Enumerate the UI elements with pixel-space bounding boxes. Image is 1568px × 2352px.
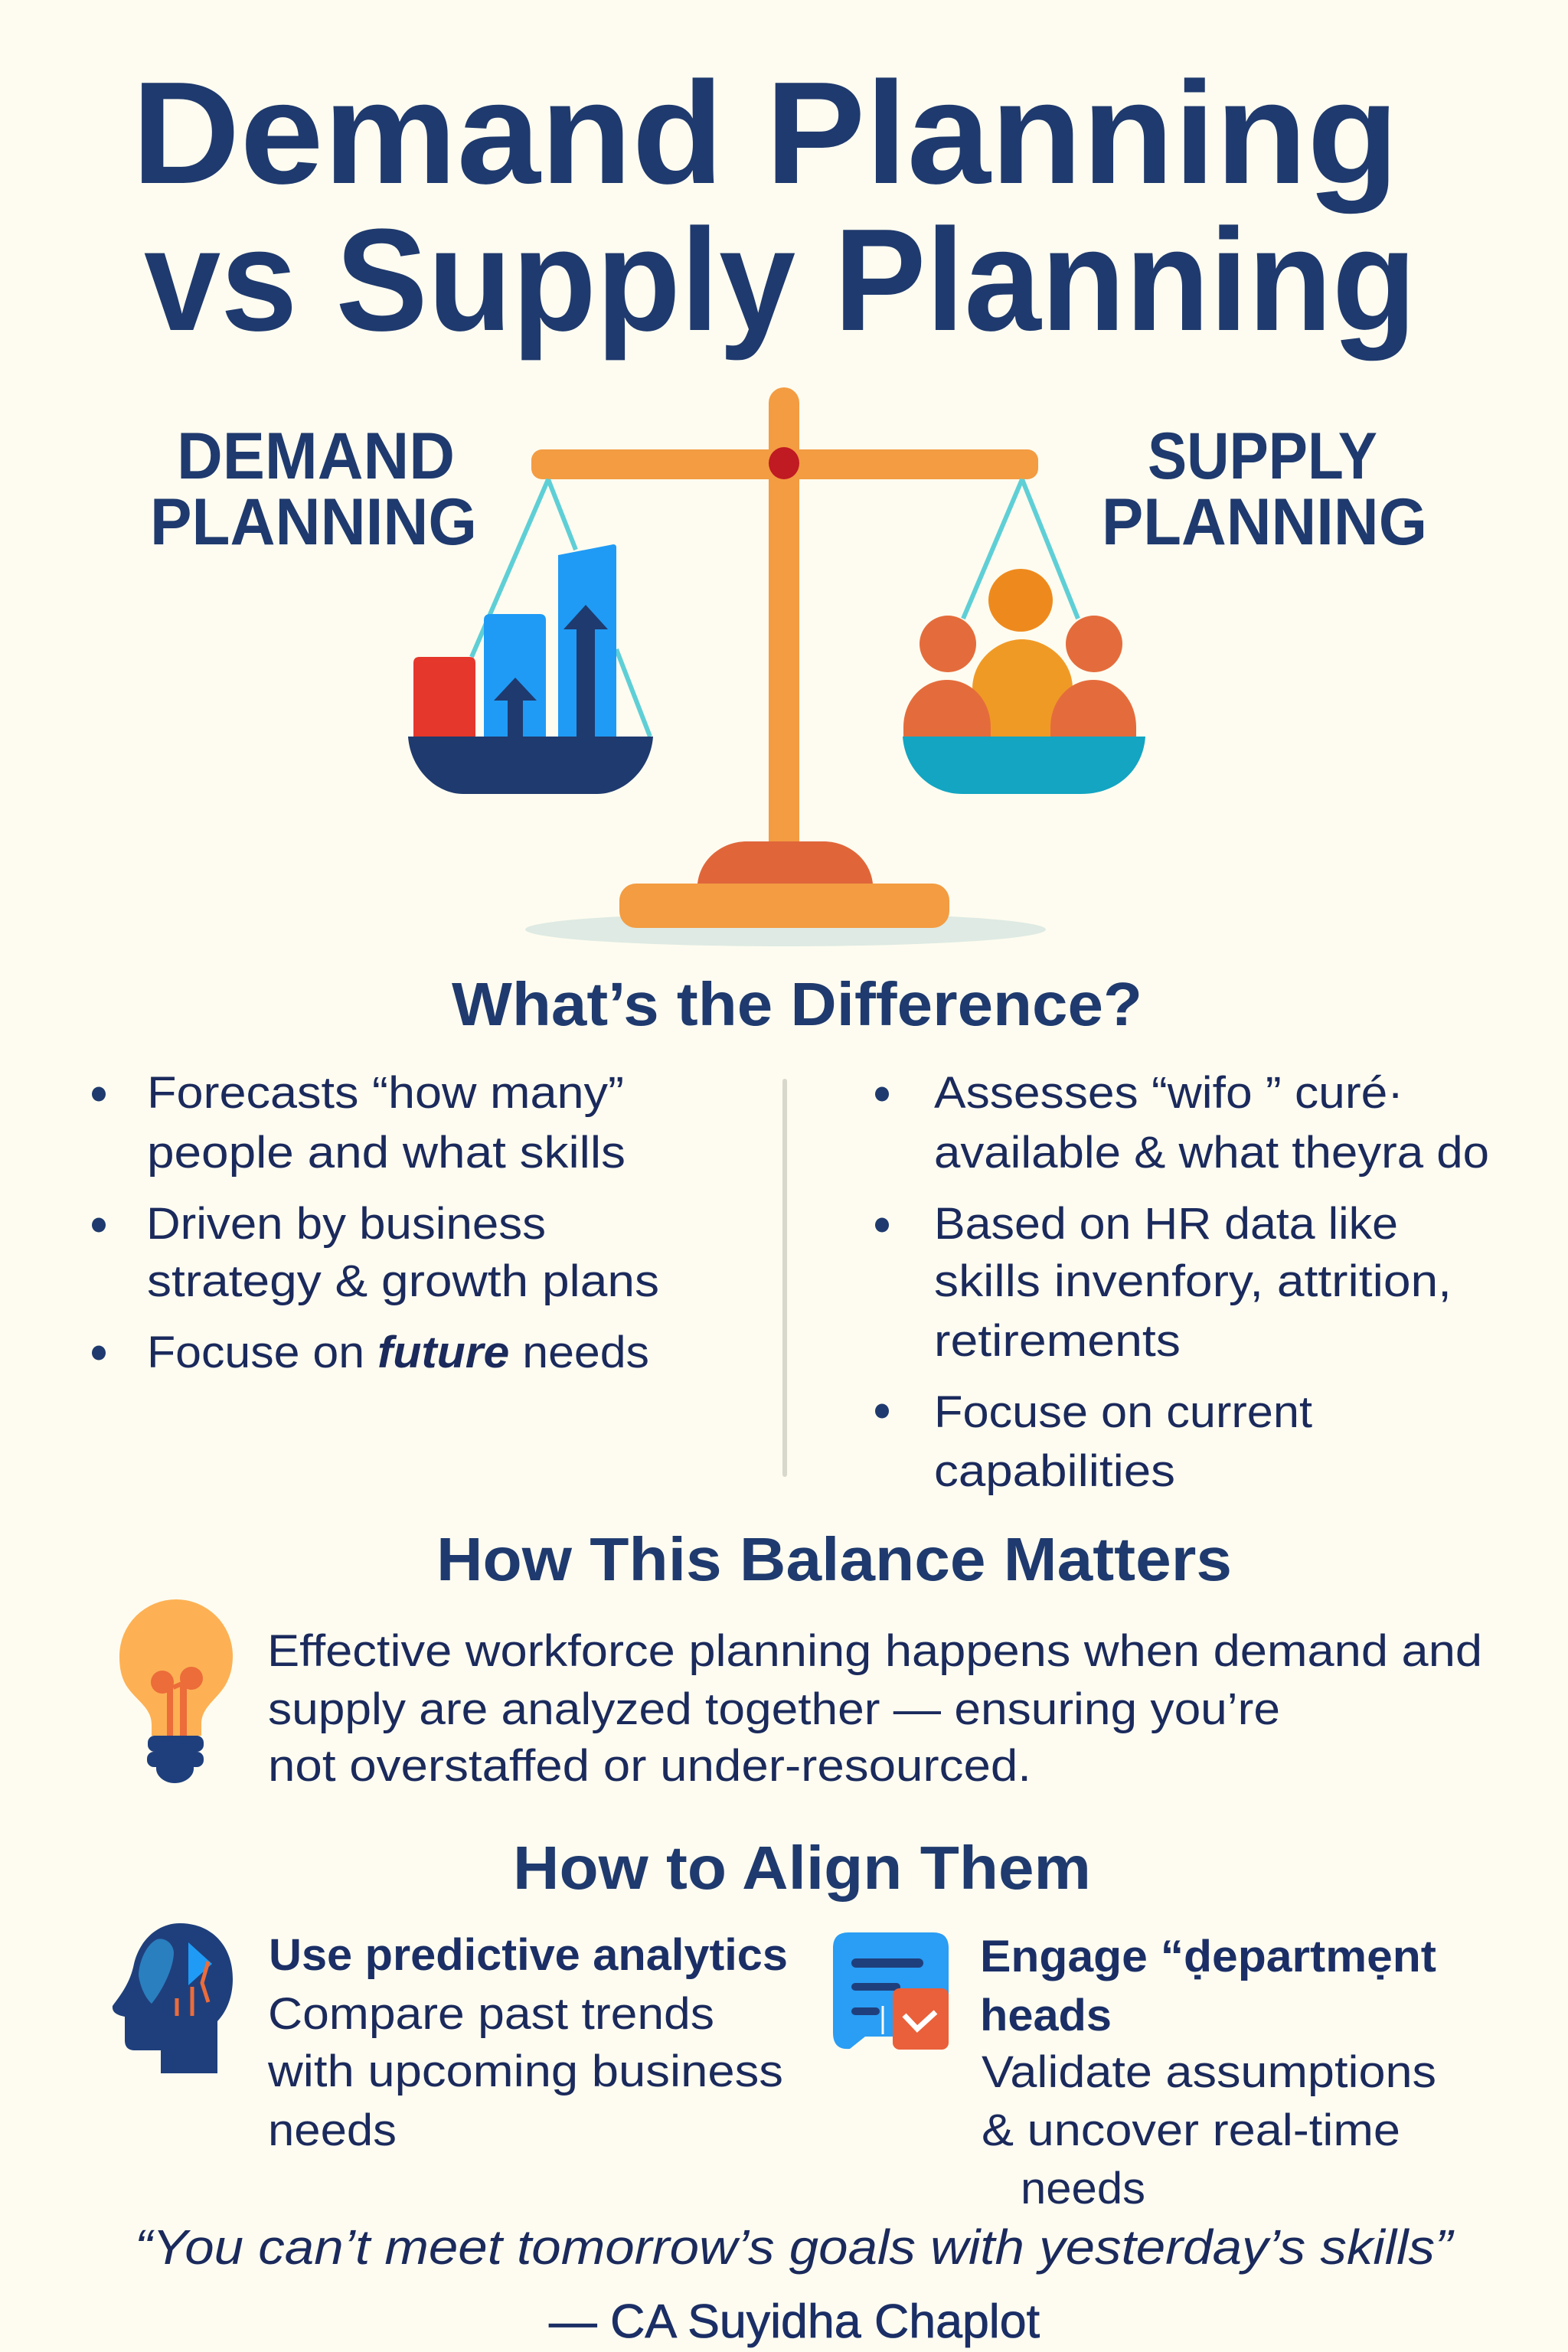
point 3 text: capabilities [934, 1446, 1175, 1496]
bullet 2 [875, 1217, 889, 1233]
point 2 text: Based on HR data like [934, 1199, 1398, 1249]
red bar [413, 657, 475, 737]
scale shadow [525, 913, 1046, 946]
bullet 1 [875, 1087, 889, 1101]
step: use predictive analytics: Use predictive analytics [269, 1930, 788, 1980]
bullet 2 [92, 1217, 106, 1233]
large arrow [564, 605, 608, 737]
right hanger strings [963, 479, 1078, 619]
point 3 text: Focuse on current [934, 1387, 1312, 1437]
scale pivot [769, 447, 799, 479]
point 3 text [934, 1387, 1312, 1496]
right pan [903, 737, 1145, 794]
scale post [769, 387, 799, 847]
icon: light bulb [119, 1599, 233, 1783]
icon: head with analytics [113, 1923, 233, 2073]
scale dome [697, 841, 873, 884]
step: engage department heads: heads [980, 1991, 1112, 2040]
balance explanation text: Effective workforce planning happens when demand and [267, 1626, 1482, 1676]
point 1 text: Forecasts “how many” [147, 1068, 624, 1118]
point 2 text: skills invenfory, attrition, [934, 1256, 1452, 1306]
step: engage department heads: & uncover real-time [982, 2105, 1400, 2155]
bullet 3 [875, 1404, 889, 1418]
balance scale illustration [408, 387, 1145, 946]
step: use predictive analytics [267, 1930, 788, 2155]
people group [903, 569, 1136, 737]
list: supply planning points [875, 1068, 1489, 1496]
attribution: — CA Suyidha Chaplot [549, 2295, 1040, 2348]
label: supply planning: SUPPLY [1148, 420, 1377, 493]
point 2 text: Driven by business [146, 1199, 546, 1249]
point 1 text [147, 1068, 626, 1178]
point 1 text: people and what skills [147, 1128, 626, 1178]
blue bar tall [558, 544, 616, 737]
step: engage department heads [980, 1932, 1436, 2213]
point 3 text: Focuse on future needs [147, 1328, 649, 1377]
list: demand planning points [92, 1068, 659, 1377]
quote: “You can’t meet tomorrow’s goals with yesterday’s skills” [135, 2220, 1455, 2275]
title: Demand Planning [132, 52, 1399, 214]
point 1 text: available & what theyra do [934, 1128, 1489, 1178]
heading: how to align them: How to Align Them [513, 1834, 1091, 1902]
title [132, 52, 1416, 361]
point 2 text: retirements [934, 1316, 1181, 1366]
step: engage department heads: Validate assumptions [982, 2047, 1436, 2097]
point 2 text [934, 1199, 1452, 1366]
bullet 3 [92, 1346, 106, 1360]
small arrow [494, 678, 537, 737]
label: demand planning: PLANNING [150, 485, 477, 559]
step: engage department heads: Engage “ḍepartmẹnt [980, 1932, 1436, 1981]
step: use predictive analytics: needs [268, 2105, 397, 2155]
step: use predictive analytics: Compare past trends [268, 1989, 714, 2039]
balance explanation text: supply are analyzed together — ensuring you’re [268, 1684, 1280, 1734]
step: engage department heads: needs [1021, 2164, 1145, 2213]
point 2 text: strategy & growth plans [147, 1256, 659, 1306]
title: vs Supply Planning [144, 199, 1416, 361]
left pan [408, 737, 653, 794]
label: supply planning [1102, 420, 1427, 559]
scale beam [531, 449, 1038, 479]
heading: how this balance matters: How This Balance Matters [436, 1525, 1232, 1593]
step: use predictive analytics: with upcoming business [267, 2047, 783, 2096]
blue bar medium [484, 614, 546, 737]
label: demand planning: DEMAND [177, 420, 455, 493]
label: demand planning [150, 420, 477, 559]
point 1 text: Assesses “wifo ” curé· [934, 1068, 1403, 1118]
icon: document with checkmark [833, 1932, 949, 2050]
scale base [619, 884, 949, 928]
left hanger strings [472, 479, 650, 737]
bullet 1 [92, 1087, 106, 1101]
point 2 text [146, 1199, 659, 1306]
heading: what's the difference: What’s the Difference? [452, 970, 1142, 1038]
label: supply planning: PLANNING [1102, 485, 1427, 559]
balance explanation text [267, 1626, 1482, 1791]
balance explanation text: not overstaffed or under-resourced. [268, 1741, 1031, 1791]
point 1 text [934, 1068, 1489, 1178]
